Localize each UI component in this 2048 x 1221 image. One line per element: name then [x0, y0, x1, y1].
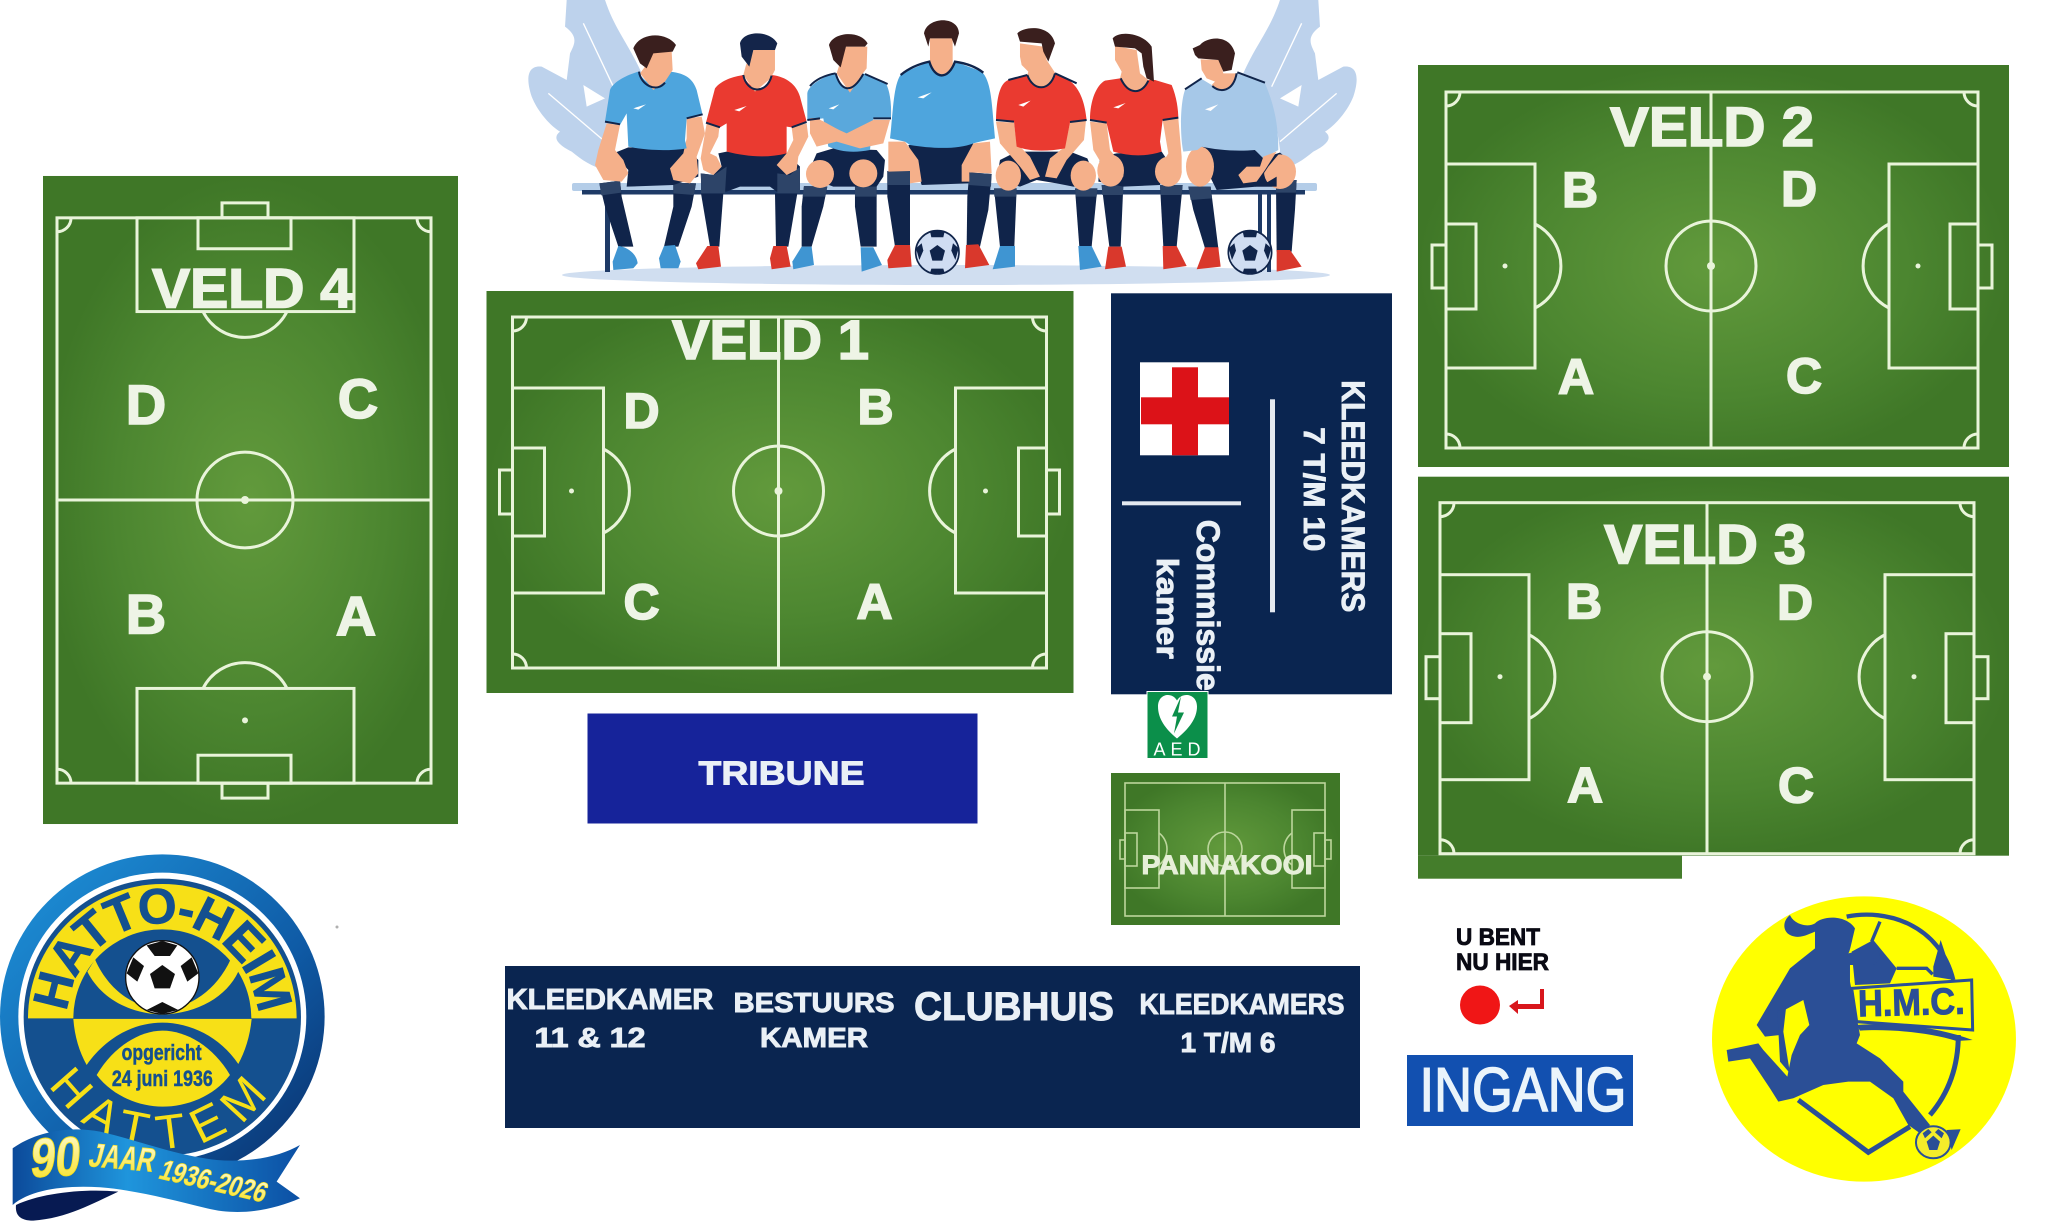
illustration: players on bench [528, 0, 1357, 285]
panel: veld 3 [1418, 477, 2009, 879]
pitch lines veld 3 [1426, 503, 1988, 854]
player 2 [696, 33, 808, 269]
yellow crescents [87, 959, 238, 1015]
zone letters veld 4: B [126, 583, 166, 646]
label kamer: kamer [1150, 558, 1185, 659]
panel: clubhuis [505, 966, 1360, 1128]
icon: first aid cross [1140, 362, 1229, 455]
logo: hatto-heim [0, 854, 325, 1221]
zone letters veld 3: B [1566, 574, 1602, 630]
zone letters veld 1: A [856, 574, 893, 630]
panel: pannakooi [1111, 773, 1340, 925]
pitch lines veld 1 [500, 317, 1060, 668]
player 4 [887, 20, 995, 268]
label pannakooi: PANNAKOOI [1142, 850, 1312, 880]
spots veld 3 [1498, 673, 1916, 681]
title veld 1: VELD 1 [672, 308, 869, 371]
pitch lines veld 2 [1432, 92, 1992, 448]
text hatto-heim: HATTO-HEIM [33, 888, 292, 1011]
zone letters veld 2: A [1558, 349, 1594, 405]
zone letters veld 1 [623, 379, 894, 630]
vest stripe [1777, 1008, 1790, 1073]
label u bent nu hier: U BENT [1456, 924, 1540, 951]
yellow disc [1712, 896, 2016, 1182]
text opgericht: opgericht [122, 1040, 202, 1065]
label bestuurskamer: BESTUURS [734, 987, 894, 1018]
title veld 2: VELD 2 [1610, 95, 1814, 158]
blue inner upper [73, 929, 251, 1018]
bench [572, 183, 1317, 272]
ribbon text years: 1936-2026 [155, 1155, 273, 1209]
spots veld 1 [569, 487, 988, 495]
label kleedkamers 1 t/m 6: KLEEDKAMERS [1140, 989, 1344, 1021]
label kleedkamers 1 t/m 6 [1140, 989, 1344, 1058]
leaf right [1243, 0, 1357, 170]
shield outline [1798, 1035, 1958, 1152]
player 7 [1181, 38, 1302, 272]
player 1 [595, 35, 705, 270]
outer rim [0, 854, 325, 1179]
label bestuurskamer [734, 987, 894, 1053]
ball outline [1847, 915, 1953, 980]
ground shadow [562, 265, 1330, 285]
arrow [1509, 989, 1544, 1014]
ball [126, 941, 199, 1014]
zone letters veld 3: C [1778, 758, 1814, 814]
boot [1947, 1129, 1961, 1150]
icon: AED sign: AED [1154, 740, 1200, 760]
players left group [595, 33, 891, 272]
divider vertical [1270, 399, 1275, 612]
ribbon text jaar: JAAR [85, 1138, 160, 1179]
title veld 3: VELD 3 [1604, 513, 1806, 576]
ball [1916, 1126, 1951, 1158]
leaf left [528, 0, 642, 170]
label kleedkamer 11 en 12: KLEEDKAMER [506, 984, 714, 1016]
label kleedkamer 11 en 12 [506, 984, 714, 1053]
sign: ingang: INGANG [1420, 1056, 1626, 1125]
zone letters veld 3: D [1777, 575, 1813, 631]
panel: veld 4 [43, 176, 458, 824]
label u bent nu hier: NU HIER [1456, 949, 1549, 976]
zone letters veld 4: C [338, 367, 378, 430]
player 3 [792, 34, 891, 272]
label clubhuis: CLUBHUIS [914, 985, 1114, 1029]
label commissie: Commissie [1190, 520, 1226, 691]
zone letters veld 1: D [623, 383, 660, 439]
label kleedkamers: KLEEDKAMERS [1335, 380, 1371, 612]
zone letters veld 3 [1566, 574, 1814, 814]
text oprichtingsdatum: 24 juni 1936 [112, 1066, 213, 1091]
icon: AED sign [1147, 692, 1208, 760]
spots veld 2 [1502, 262, 1920, 270]
callout: u bent nu hier [1456, 924, 1549, 1024]
ribbon text 90: 90 [28, 1125, 84, 1189]
label kleedkamers 1 t/m 6: 1 T/M 6 [1180, 1027, 1276, 1058]
yellow upper half [28, 884, 297, 1018]
yellow eye [97, 1031, 230, 1107]
banner [1852, 980, 1973, 1030]
divider horizontal [1122, 501, 1241, 505]
ponytail [1784, 915, 1815, 937]
ribbon fold [16, 1191, 118, 1221]
zone letters veld 2: D [1781, 161, 1817, 217]
label tribune: TRIBUNE [698, 754, 864, 792]
zone letters veld 3: A [1567, 758, 1603, 814]
zone letters veld 2 [1558, 161, 1822, 405]
ball patches [1852, 940, 1954, 985]
zone letters veld 4: A [336, 585, 376, 648]
football 1 [916, 231, 959, 274]
player 6 [1090, 34, 1187, 269]
text hattem: HATTEM [50, 1066, 266, 1148]
player 5 [993, 28, 1102, 270]
zone letters veld 4 [126, 367, 378, 648]
icon: red dot [1460, 986, 1500, 1024]
green tab veld 3 [1418, 856, 1682, 879]
spots veld 4 [241, 496, 249, 723]
players middle group [887, 20, 1102, 270]
title veld 4: VELD 4 [152, 257, 352, 320]
logo: h.m.c. [1712, 896, 2016, 1182]
panel: kleedkamers 7 t/m 10 [1111, 293, 1392, 694]
pitch lines pannakooi [1120, 783, 1331, 916]
zone letters veld 1: C [623, 574, 660, 630]
yellow lower area [73, 1019, 252, 1065]
zone letters veld 2: C [1786, 348, 1822, 404]
players right group [1090, 34, 1302, 272]
text h.m.c.: H.M.C. [1857, 980, 1965, 1024]
ball seams [1872, 922, 1933, 974]
label kleedkamer 11 en 12: 11 & 12 [534, 1022, 646, 1053]
player silhouette [1727, 918, 1930, 1133]
label u bent nu hier [1456, 924, 1549, 976]
zone letters veld 2: B [1562, 162, 1598, 218]
pitch lines veld 4 [57, 203, 431, 798]
stray mark [336, 926, 338, 928]
football 2 [1228, 231, 1272, 274]
panel: tribune [588, 714, 978, 824]
zone letters veld 4: D [126, 373, 166, 436]
label 7 t/m 10: 7 T/M 10 [1297, 427, 1330, 551]
shield band [1857, 1024, 1973, 1041]
panel: veld 1 [486, 291, 1074, 693]
label bestuurskamer: KAMER [760, 1022, 868, 1053]
ribbon [13, 1129, 300, 1212]
panel: veld 2 [1418, 65, 2009, 467]
zone letters veld 1: B [857, 379, 894, 435]
